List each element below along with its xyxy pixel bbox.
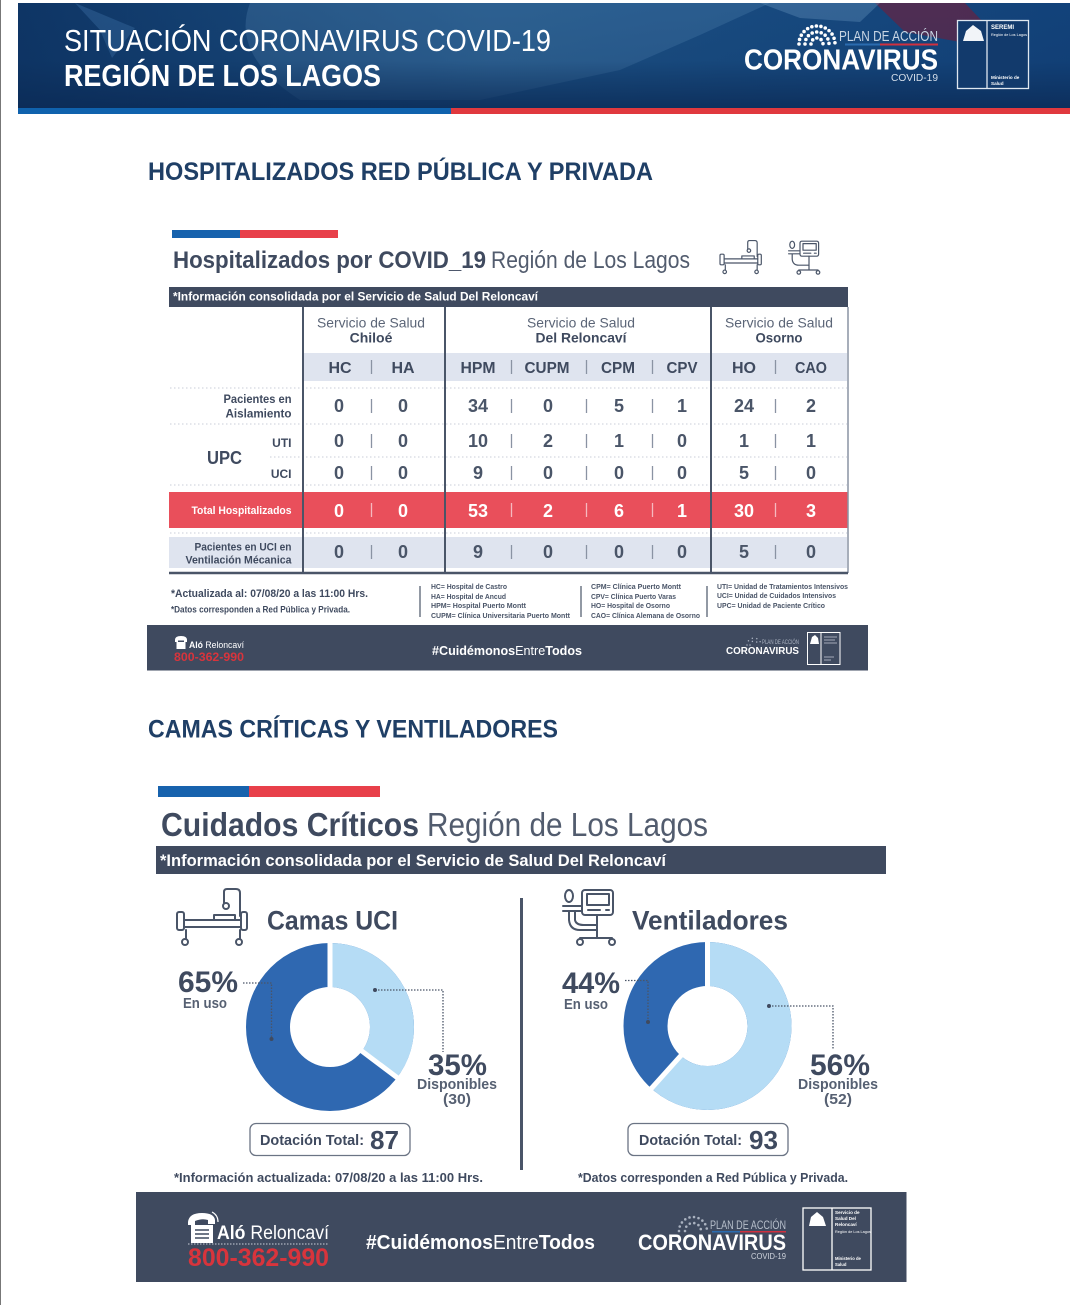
row: total hospitalizados: 6	[614, 501, 624, 521]
row: ventilación mecánica: 0	[334, 542, 344, 562]
callout: 44% en uso	[562, 967, 650, 1024]
information bar	[156, 846, 886, 874]
alo reloncavi: Aló Reloncaví	[217, 1223, 330, 1244]
row: total hospitalizados: 53	[468, 501, 488, 521]
dotación total: camas	[250, 1124, 410, 1156]
legend: abbreviations 1: HC= Hospital de Castro	[431, 582, 507, 591]
row: UCI: 0	[334, 463, 344, 483]
row: total hospitalizados: 0	[398, 501, 408, 521]
column headers: HPM	[460, 360, 496, 377]
logo: servicio de salud del reloncaví: Salud Del	[835, 1216, 856, 1221]
icon: hospital bed small	[720, 241, 761, 274]
column headers: CPM	[601, 360, 635, 377]
heading: camas uci: Camas UCI	[267, 906, 398, 936]
information bar	[169, 287, 848, 307]
row: total hospitalizados	[192, 501, 816, 521]
heading: hospitalizados: HOSPITALIZADOS RED PÚBLICA Y PRIVADA	[148, 156, 653, 186]
row: ventilación mecánica: 0	[543, 542, 553, 562]
row: UTI: 0	[398, 431, 408, 451]
logo: plan de acción coronavirus: CORONAVIRUS	[638, 1230, 786, 1255]
panel title	[173, 247, 690, 274]
legend: abbreviations 1: HA= Hospital de Ancud	[431, 592, 506, 601]
alo reloncavi small: Aló Reloncaví	[189, 640, 244, 650]
row: ventilación mecánica: 0	[614, 542, 624, 562]
logo: ministerio de salud seremi: Ministerio de	[991, 75, 1020, 80]
row: UTI: 0	[334, 431, 344, 451]
logo: servicio de salud del reloncaví: Región de Los Lagos	[835, 1230, 871, 1234]
information bar: *Información consolidada por el Servicio de Salud Del Reloncaví	[173, 290, 539, 304]
dotación total: ventiladores: Dotación Total:	[639, 1132, 742, 1149]
panel title: Región de Los Lagos	[427, 806, 708, 843]
legend: abbreviations 1: HPM= Hospital Puerto Montt	[431, 601, 527, 610]
logo: ministerio de salud seremi: SEREMI	[991, 25, 1014, 31]
logo: ministerio de salud seremi: Salud	[991, 81, 1004, 86]
service headers: Servicio de Salud	[317, 314, 425, 330]
alo reloncavi	[188, 1223, 330, 1272]
icon: telephone	[188, 1212, 218, 1243]
icon: ventilator small	[789, 241, 820, 274]
note: información actualizada: *Información actualizada: 07/08/20 a las 11:00 Hrs.	[174, 1170, 483, 1185]
dotación total: camas: 87	[370, 1125, 399, 1155]
row: pacientes en aislamiento: 1	[677, 396, 687, 416]
row: UCI: 9	[473, 463, 483, 483]
callout: 35% disponibles: 35%	[428, 1049, 487, 1082]
row: UCI: 0	[543, 463, 553, 483]
row: UTI: 2	[543, 431, 553, 451]
row: total hospitalizados: 0	[334, 501, 344, 521]
column headers: CPV	[666, 360, 698, 377]
logo: servicio de salud del reloncaví: Servicio de	[835, 1210, 860, 1215]
dotación total: ventiladores	[628, 1124, 788, 1156]
callout: 35% disponibles: Disponibles	[417, 1076, 497, 1093]
legend: abbreviations 2	[581, 582, 700, 620]
logo: ministerio de salud seremi	[958, 20, 1028, 89]
logo: ministerio de salud seremi: Región de Los Lagos	[991, 32, 1027, 37]
logo: plan de acción coronavirus: PLAN DE ACCIÓN	[839, 28, 938, 45]
logo small: CORONAVIRUS	[726, 645, 799, 657]
service headers: Servicio de Salud	[725, 314, 833, 330]
column headers: CUPM	[524, 360, 570, 377]
callout: 65% en uso: En uso	[183, 995, 227, 1012]
row: total hospitalizados: 30	[734, 501, 754, 521]
row: pacientes en aislamiento: 5	[614, 396, 624, 416]
row: UTI: 1	[739, 431, 749, 451]
row: UCI: 5	[739, 463, 749, 483]
callout: 35% disponibles	[373, 988, 497, 1108]
hashtag small: #CuidémonosEntreTodos	[432, 643, 582, 658]
logo: plan de acción coronavirus: PLAN DE ACCIÓN	[710, 1219, 786, 1232]
callout: 56% disponibles	[767, 1004, 878, 1108]
legend: abbreviations 2: CPM= Clínica Puerto Montt	[591, 582, 682, 591]
row: UTI: 10	[468, 431, 488, 451]
column headers: HA	[391, 360, 415, 377]
legend: abbreviations 2: CPV= Clínica Puerto Varas	[591, 592, 676, 601]
row: UTI	[272, 431, 816, 451]
callout: 35% disponibles: (30)	[443, 1091, 471, 1108]
row: pacientes en aislamiento: 0	[398, 396, 408, 416]
logo: plan de acción coronavirus: CORONAVIRUS	[744, 44, 938, 76]
update notes	[171, 588, 368, 616]
dotación total: ventiladores: 93	[749, 1125, 778, 1155]
information bar: *Información consolidada por el Servicio de Salud Del Reloncaví	[160, 851, 667, 870]
row: UCI: 0	[614, 463, 624, 483]
row: pacientes en aislamiento: 0	[334, 396, 344, 416]
panel title: Cuidados Críticos	[161, 806, 419, 843]
column separators	[372, 360, 776, 559]
accent bar	[158, 786, 380, 797]
alo reloncavi small	[174, 640, 244, 664]
column headers: CAO	[795, 360, 827, 377]
callout: 65% en uso	[178, 966, 274, 1041]
row: ventilación mecánica	[186, 542, 816, 566]
update notes: *Actualizada al: 07/08/20 a las 11:00 Hrs.	[171, 588, 368, 600]
row: UCI: UCI	[271, 467, 292, 481]
callout: 65% en uso: 65%	[178, 966, 238, 999]
row: total hospitalizados: 1	[677, 501, 687, 521]
alo reloncavi: 800-362-990	[188, 1244, 329, 1272]
update notes: *Datos corresponden a Red Pública y Privada.	[171, 604, 350, 616]
icon: telephone small	[175, 636, 187, 649]
panel title: Hospitalizados por COVID_19	[173, 247, 486, 274]
donut chart: camas uci	[268, 935, 404, 1089]
row: pacientes en aislamiento: Aislamiento	[226, 406, 292, 420]
callout: 56% disponibles: 56%	[810, 1049, 870, 1082]
legend: abbreviations 3: UCI= Unidad de Cuidados Intensivos	[717, 591, 836, 600]
row: pacientes en aislamiento	[224, 392, 816, 420]
logo small	[726, 632, 840, 665]
header title: REGIÓN DE LOS LAGOS	[64, 57, 381, 93]
dotación total: camas: Dotación Total:	[260, 1132, 364, 1149]
row: pacientes en aislamiento: 0	[543, 396, 553, 416]
row: ventilación mecánica: 0	[677, 542, 687, 562]
legend: abbreviations 3: UPC= Unidad de Paciente Crítico	[717, 601, 825, 610]
row: UCI	[271, 463, 816, 483]
header title: SITUACIÓN CORONAVIRUS COVID-19	[64, 23, 551, 58]
row: total hospitalizados: 3	[806, 501, 816, 521]
row: pacientes en aislamiento: Pacientes en	[224, 392, 292, 406]
icon: ventilator	[563, 890, 615, 945]
row: ventilación mecánica: 5	[739, 542, 749, 562]
icon: hospital bed	[177, 889, 247, 945]
legend: abbreviations 1: CUPM= Clínica Universitaria Puerto Montt	[431, 611, 570, 620]
logo: servicio de salud del reloncaví: Ministerio de	[835, 1256, 861, 1261]
row: UTI: 1	[806, 431, 816, 451]
column headers: HO	[732, 360, 756, 377]
logo: servicio de salud del reloncaví: Salud	[835, 1262, 847, 1267]
logo: plan de acción coronavirus	[744, 26, 938, 84]
row: ventilación mecánica: 0	[806, 542, 816, 562]
service headers: Chiloé	[350, 330, 393, 346]
header title	[64, 23, 551, 93]
panel title: Región de Los Lagos	[491, 247, 690, 274]
row: ventilación mecánica: 0	[398, 542, 408, 562]
service headers: Osorno	[756, 330, 802, 346]
service headers	[317, 314, 833, 346]
legend: abbreviations 1	[420, 582, 570, 620]
row: UCI: 0	[677, 463, 687, 483]
alo reloncavi small: 800-362-990	[174, 650, 244, 664]
row: UTI: 1	[614, 431, 624, 451]
row: UTI: UTI	[272, 436, 292, 450]
panel: cuidados críticos	[136, 786, 906, 1282]
legend: abbreviations 2: HO= Hospital de Osorno	[591, 601, 670, 610]
footer band: hospitalizados	[147, 625, 868, 670]
legend: abbreviations 3	[707, 582, 848, 617]
header banner	[18, 3, 1070, 114]
row: UPC label: UPC	[207, 447, 242, 468]
row: pacientes en aislamiento: 34	[468, 396, 488, 416]
footer band: cuidados críticos	[136, 1192, 906, 1282]
service headers: Servicio de Salud	[527, 314, 635, 330]
logo: servicio de salud del reloncaví: Reloncaví	[835, 1222, 857, 1227]
header colour strip	[18, 108, 1070, 114]
row: UCI: 0	[398, 463, 408, 483]
row: total hospitalizados: Total Hospitalizados	[192, 505, 292, 517]
callout: 44% en uso: 44%	[562, 967, 620, 1000]
column headers: HC	[328, 360, 352, 377]
row: total hospitalizados: 2	[543, 501, 553, 521]
row: ventilación mecánica: 9	[473, 542, 483, 562]
legend: abbreviations 3: UTI= Unidad de Tratamientos Intensivos	[717, 582, 848, 591]
logo: servicio de salud del reloncaví	[803, 1208, 871, 1270]
row: UTI: 0	[677, 431, 687, 451]
heading: camas críticas: CAMAS CRÍTICAS Y VENTILADORES	[148, 714, 558, 744]
service headers: Del Reloncaví	[536, 330, 628, 346]
table bands and grid	[169, 307, 848, 573]
note: datos corresponden: *Datos corresponden a Red Pública y Privada.	[578, 1170, 848, 1185]
legend: abbreviations 2: CAO= Clínica Alemana de Osorno	[591, 611, 700, 620]
row: UCI: 0	[806, 463, 816, 483]
panel title	[161, 806, 708, 843]
logo: plan de acción coronavirus: COVID-19	[891, 72, 938, 84]
panel: hospitalizados table	[147, 230, 868, 670]
row: pacientes en aislamiento: 24	[734, 396, 754, 416]
accent bar	[172, 230, 338, 238]
logo: plan de acción coronavirus: COVID-19	[751, 1252, 787, 1261]
donut chart: ventiladores	[646, 934, 770, 1093]
callout: 56% disponibles: (52)	[824, 1091, 852, 1108]
callout: 56% disponibles: Disponibles	[798, 1076, 878, 1093]
hashtag: #CuidémonosEntreTodos	[366, 1232, 595, 1254]
logo small: PLAN DE ACCIÓN	[762, 639, 799, 646]
callout: 44% en uso: En uso	[564, 996, 608, 1013]
column headers	[328, 360, 827, 377]
heading: ventiladores: Ventiladores	[632, 906, 788, 936]
row: pacientes en aislamiento: 2	[806, 396, 816, 416]
logo: plan de acción coronavirus	[638, 1217, 787, 1261]
row: ventilación mecánica: Pacientes en UCI en	[194, 542, 292, 554]
row: ventilación mecánica: Ventilación Mécanica	[186, 554, 292, 566]
